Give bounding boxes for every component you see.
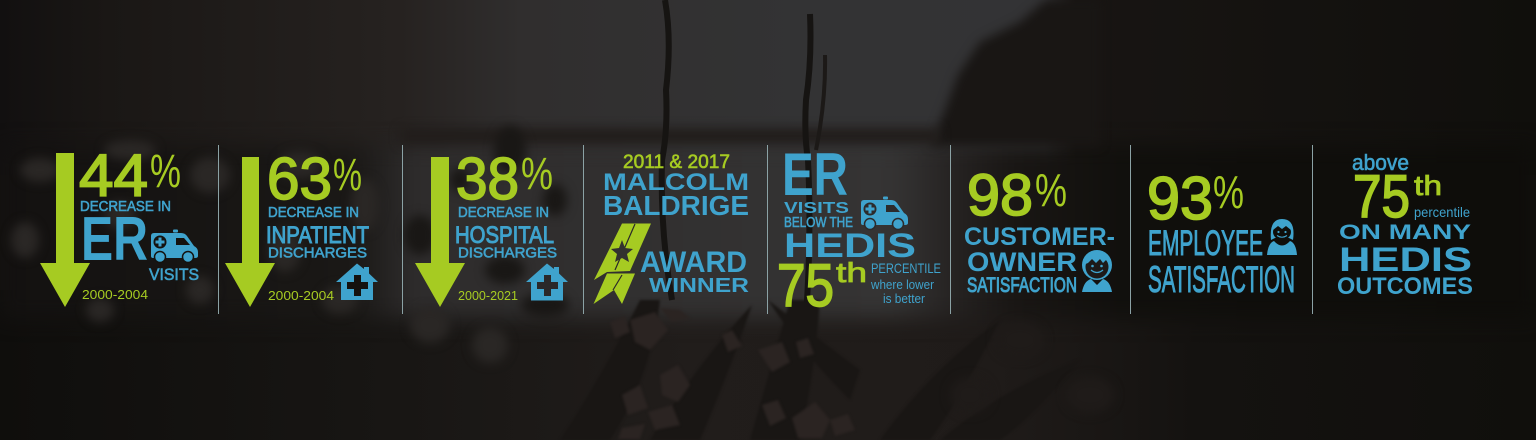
label: inpatient: INPATIENT xyxy=(266,222,369,249)
stat: 63%: 63 xyxy=(267,146,332,212)
stat: 38% xyxy=(456,146,553,212)
panel: 44% decrease in ER visits xyxy=(40,143,199,307)
label: decrease in: DECREASE IN xyxy=(268,205,359,221)
label: ER: ER xyxy=(81,205,148,274)
label: HEDIS: HEDIS xyxy=(784,227,916,265)
icon: down arrow xyxy=(415,157,465,307)
stat: 75th: 75 xyxy=(1353,163,1410,230)
icon: smiling man xyxy=(1082,250,1112,292)
label: ER: ER xyxy=(782,141,848,208)
label: owner: OWNER xyxy=(967,247,1077,277)
icon: house with cross xyxy=(526,264,568,300)
label: winner: WINNER xyxy=(649,275,750,297)
stat: 75th: th xyxy=(836,257,867,288)
panel: above 75th percentile on many HEDIS outcomes xyxy=(1337,150,1473,300)
label: decrease in: DECREASE IN xyxy=(458,205,549,221)
label: discharges: DISCHARGES xyxy=(268,244,367,262)
stat: 98%: 98 xyxy=(967,163,1033,228)
panel: 63% decrease in inpatient discharges xyxy=(225,146,378,307)
stat: 75th: 75 xyxy=(777,252,834,319)
label: decrease in: DECREASE IN xyxy=(80,199,171,215)
label: satisfaction: SATISFACTION xyxy=(967,274,1077,297)
label: customer-: CUSTOMER- xyxy=(964,223,1115,251)
icon: down arrow xyxy=(40,153,90,307)
label: visits: VISITS xyxy=(149,265,199,284)
label: visits: VISITS xyxy=(784,200,849,217)
icon: ambulance xyxy=(151,230,198,262)
panel: Malcolm Baldrige award xyxy=(594,152,750,304)
stat: 38%: 38 xyxy=(456,146,519,212)
panel: 98% customer-owner satisfaction xyxy=(964,163,1115,297)
icon: down arrow xyxy=(225,157,275,307)
date range: 2000-2004 xyxy=(268,288,334,303)
icon: smiling woman xyxy=(1267,219,1297,255)
icon: house with cross xyxy=(336,264,378,300)
stat: 63% xyxy=(267,146,362,212)
label: award: AWARD xyxy=(640,246,747,279)
label: satisfaction: SATISFACTION xyxy=(1148,259,1295,300)
label: Malcolm: MALCOLM xyxy=(603,169,749,196)
note: where lower is better xyxy=(870,277,935,306)
stat: 38%: % xyxy=(521,148,553,199)
date range: 2000-2004 xyxy=(82,287,148,302)
stat: 93%: 93 xyxy=(1147,165,1213,232)
stat: 98% xyxy=(967,163,1067,228)
label: on many: ON MANY xyxy=(1339,220,1471,244)
vertical dividers between statistics xyxy=(218,145,1312,314)
stat: 93%: % xyxy=(1213,166,1244,218)
panel: ER visits below HEDIS 75th percentile xyxy=(777,141,941,319)
stat: 63%: % xyxy=(333,149,362,200)
icon: ambulance xyxy=(861,196,908,230)
panel: 38% decrease in hospital discharges xyxy=(415,146,568,307)
stat: 98%: % xyxy=(1035,164,1067,216)
icon: award ribbon with star xyxy=(594,224,651,304)
label: above: above xyxy=(1352,150,1409,175)
stat: 44%: % xyxy=(150,144,181,197)
note: where lower is better: where lower xyxy=(870,277,935,292)
label: below the: BELOW THE xyxy=(784,214,853,231)
label: percentile: PERCENTILE xyxy=(871,260,941,276)
date range: 2000-2021 xyxy=(458,288,518,303)
label: employee: EMPLOYEE xyxy=(1148,224,1263,263)
stat: 93% xyxy=(1147,165,1244,232)
stat: 75th: th xyxy=(1414,170,1442,201)
label: Baldrige: BALDRIGE xyxy=(603,190,749,221)
years: 2011 & 2017 xyxy=(623,152,730,173)
label: discharges: DISCHARGES xyxy=(458,244,557,262)
stat: 44% xyxy=(79,143,181,209)
label: hospital: HOSPITAL xyxy=(455,222,554,249)
panel: 93% employee satisfaction xyxy=(1147,165,1297,300)
label: HEDIS: HEDIS xyxy=(1339,241,1472,279)
label: outcomes: OUTCOMES xyxy=(1337,273,1473,300)
stat: 44%: 44 xyxy=(79,143,148,209)
label: percentile: percentile xyxy=(1414,204,1470,220)
note: where lower is better: is better xyxy=(883,291,926,306)
